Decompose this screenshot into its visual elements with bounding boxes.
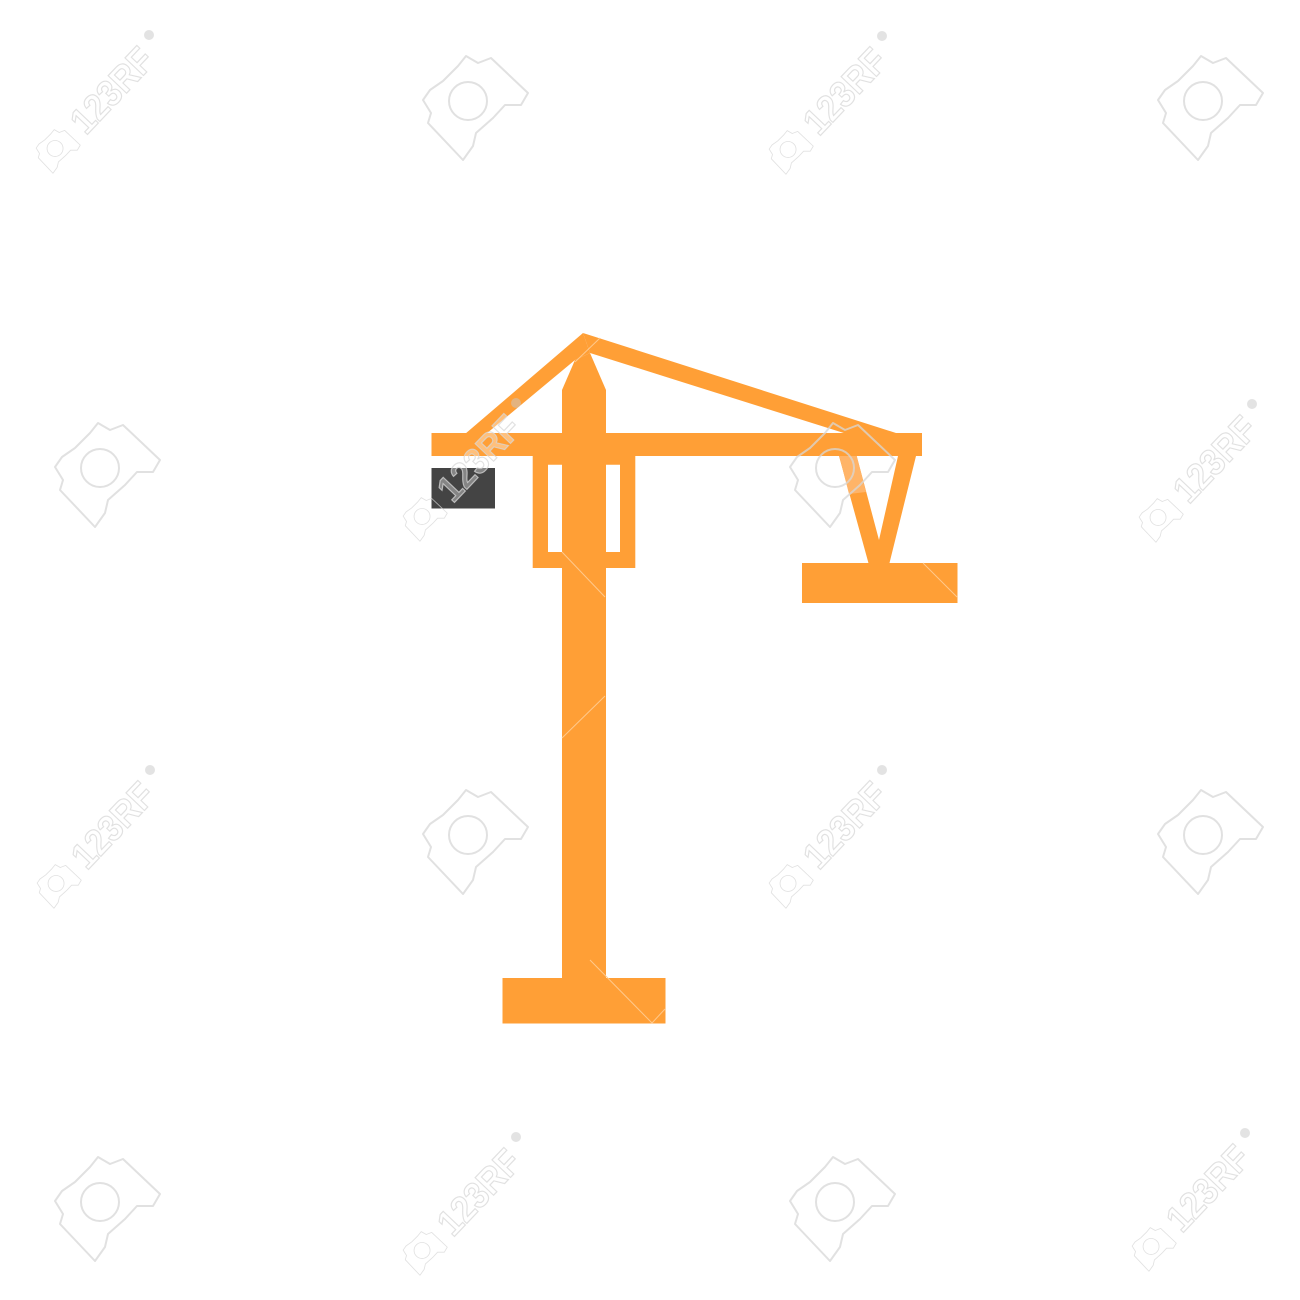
operator cabin frame bbox=[533, 456, 635, 568]
watermark logo 7 bbox=[403, 1132, 529, 1275]
horizontal jib bbox=[432, 433, 922, 456]
watermark logo 8: 123RF bbox=[1158, 1137, 1258, 1240]
watermark logo 8 bbox=[1132, 1128, 1258, 1271]
watermark camera mark 7 bbox=[55, 1157, 160, 1261]
watermark camera mark 5 bbox=[423, 790, 528, 894]
suspended load block bbox=[802, 563, 958, 603]
icon: tower crane bbox=[432, 333, 958, 1024]
watermark camera mark 8 bbox=[790, 1157, 895, 1261]
V-shaped load hanger bbox=[839, 456, 916, 565]
watermark logo 1 bbox=[36, 30, 162, 173]
crane base plate bbox=[502, 978, 666, 1024]
watermark logo 4: 123RF bbox=[1165, 408, 1265, 511]
crane mast with pointed top bbox=[562, 353, 606, 985]
watermark logo 7: 123RF bbox=[429, 1141, 529, 1244]
right support cable bbox=[583, 333, 896, 434]
watermark logo 6 bbox=[769, 765, 895, 908]
watermark logo 3 bbox=[403, 398, 529, 541]
watermark logo 2 bbox=[769, 31, 895, 174]
lightened watermark band on the hanger arm bbox=[839, 456, 866, 494]
watermark camera mark 2 bbox=[1158, 56, 1263, 160]
left support cable bbox=[465, 333, 590, 434]
watermark camera mark 4 bbox=[790, 423, 895, 527]
watermark logo 1: 123RF bbox=[62, 39, 162, 142]
watermark logo 5: 123RF bbox=[63, 774, 163, 877]
watermark camera mark 6 bbox=[1158, 790, 1263, 894]
thin light seams across the crane bbox=[562, 338, 957, 1023]
watermark logo 6: 123RF bbox=[795, 774, 895, 877]
watermark camera mark 3 bbox=[55, 423, 160, 527]
watermark camera mark 1 bbox=[423, 56, 528, 160]
watermark logo 3: 123RF bbox=[429, 407, 529, 510]
watermark logo 5 bbox=[37, 765, 163, 908]
watermark logo 4 bbox=[1139, 399, 1265, 542]
icon: dark counterweight bbox=[432, 468, 495, 508]
watermark logo 2: 123RF bbox=[795, 40, 895, 143]
